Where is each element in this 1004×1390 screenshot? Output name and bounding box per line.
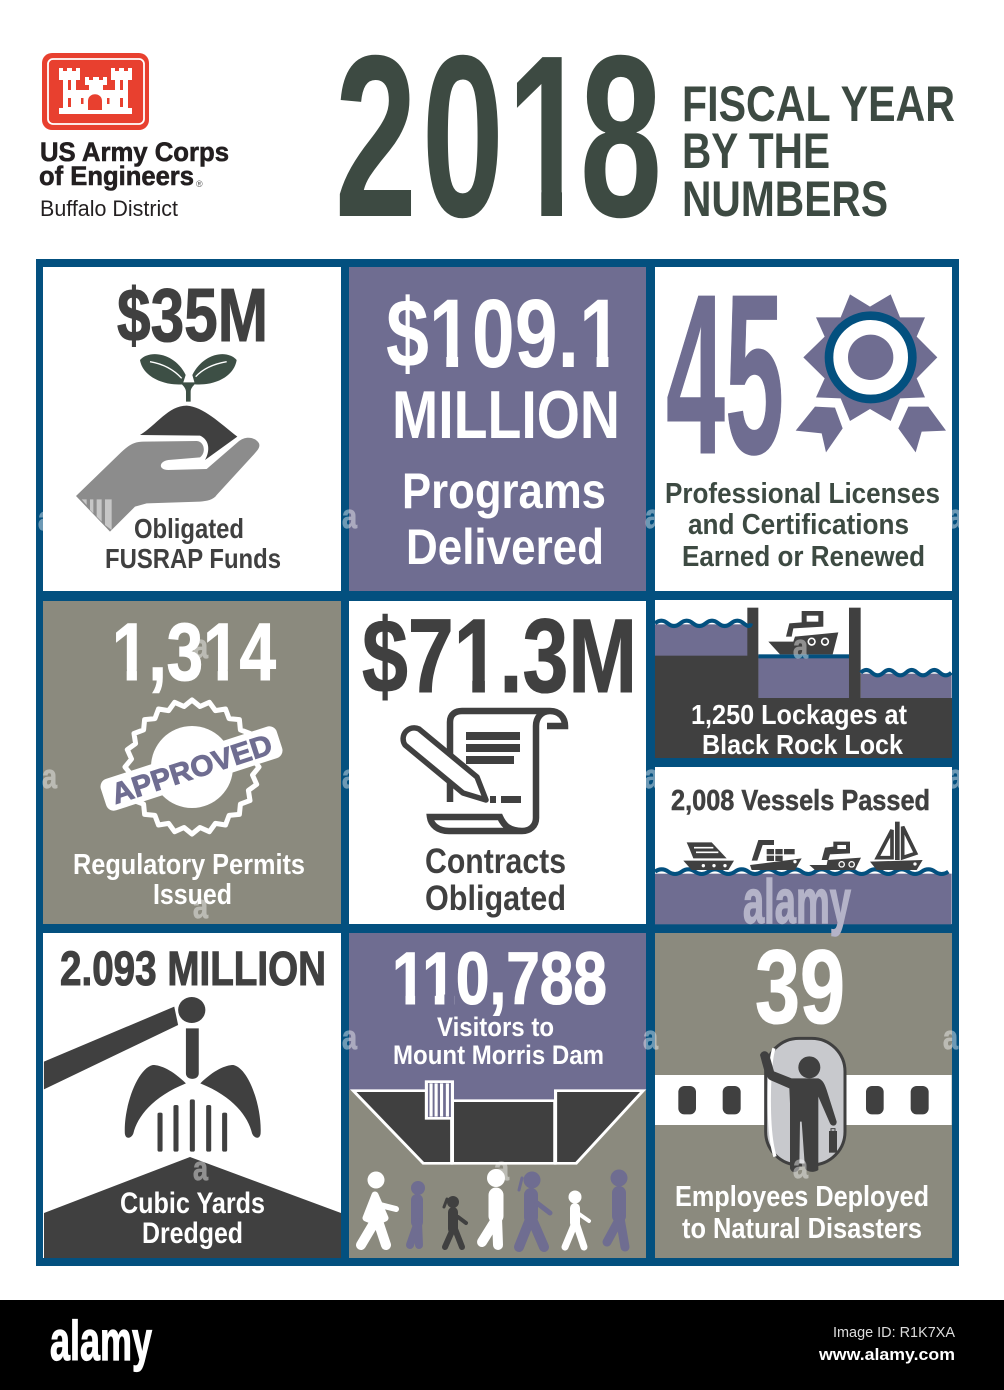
heading: Mount Morris Dam	[393, 1040, 604, 1070]
watermark letters: a	[494, 1150, 510, 1188]
illustration: lock chambers	[655, 608, 952, 698]
illustration: airplane with person in door	[655, 1038, 952, 1172]
icon: scroll and pencil	[403, 711, 565, 831]
panel: 110,788 visitors to Mount Morris Dam	[349, 933, 646, 1258]
panel: $35M FUSRAP funds	[43, 267, 341, 591]
caption	[120, 1187, 265, 1250]
heading: $71.3M: $71.3M	[362, 598, 637, 715]
panel: 1,250 lockages at Black Rock Lock	[655, 600, 952, 760]
caption: Obligated	[134, 513, 244, 544]
logo wordmark: US Army Corps	[40, 137, 229, 167]
caption: Cubic Yards	[120, 1187, 265, 1220]
logo wordmark: ®	[196, 179, 203, 189]
caption: Employees Deployed	[675, 1181, 929, 1213]
watermark letters: a	[793, 628, 809, 666]
panel: 1,314 regulatory permits	[43, 601, 341, 924]
caption: Contracts	[425, 842, 566, 881]
watermark letters: a	[342, 498, 358, 536]
panel: 39 employees deployed	[655, 929, 952, 1258]
panel: 45 licenses and certifications	[655, 248, 952, 591]
caption	[691, 699, 907, 760]
subtitle: fiscal year by the numbers: BY THE	[682, 123, 830, 179]
caption	[73, 849, 305, 911]
image id: Image ID: R1K7XA	[833, 1324, 955, 1341]
icon: red castle badge	[42, 53, 149, 130]
heading: 39: 39	[755, 929, 845, 1046]
icon: approved seal: APPROVED	[108, 729, 276, 811]
caption: FUSRAP Funds	[105, 543, 281, 574]
heading: Visitors to	[437, 1012, 554, 1042]
panel: $109.1 million programs delivered	[349, 267, 646, 591]
watermark letters: a	[342, 758, 358, 796]
logo wordmark	[39, 137, 229, 221]
watermark letters: a	[943, 1019, 959, 1057]
caption	[105, 513, 281, 574]
icon: sailboat	[870, 822, 923, 870]
caption	[665, 478, 940, 573]
caption: 1,250 Lockages at	[691, 699, 907, 730]
watermark letters: a	[193, 628, 209, 666]
caption: Regulatory Permits	[73, 849, 305, 881]
icon: award rosette	[796, 294, 946, 452]
icon: tugboat	[809, 842, 861, 870]
heading: 2,008 Vessels Passed	[671, 785, 930, 817]
icon: approved seal	[98, 700, 285, 834]
watermark letters: a	[193, 1150, 209, 1188]
watermark letters	[38, 498, 964, 1188]
caption: Professional Licenses	[665, 478, 940, 510]
subtitle: fiscal year by the numbers: NUMBERS	[682, 171, 888, 227]
watermark letters: a	[645, 498, 661, 536]
panel: $71.3M contracts obligated	[349, 598, 646, 924]
footer bar	[0, 1300, 1004, 1390]
illustration: dam	[353, 1082, 643, 1163]
watermark letters: a	[38, 500, 54, 538]
heading: 110,788	[392, 937, 607, 1020]
watermark letters: a	[793, 1148, 809, 1186]
icon: hand holding seedling	[76, 354, 259, 532]
logo: US Army Corps of Engineers Buffalo District	[39, 53, 229, 221]
footer logo: alamy: alamy	[50, 1309, 152, 1372]
watermark letters: a	[948, 498, 964, 536]
panel: $109.1 million programs delivered: Delivered	[406, 519, 604, 575]
watermark letters: a	[342, 1019, 358, 1057]
icon: tugboat in lock	[768, 611, 838, 654]
panel: 45 licenses and certifications: 45	[666, 248, 784, 502]
caption	[675, 1181, 929, 1245]
icon: dredge clamshell bucket	[44, 997, 261, 1152]
heading	[392, 937, 607, 1070]
caption: Black Rock Lock	[702, 729, 903, 760]
watermark: alamy: alamy	[743, 868, 851, 937]
panel: $109.1 million programs delivered: MILLION	[392, 377, 620, 453]
title: 2018: 2018	[335, 8, 662, 266]
icon: yacht	[683, 842, 734, 870]
dredged material mound	[44, 1157, 341, 1258]
watermark letters: a	[644, 758, 660, 796]
icon: cargo ship	[750, 840, 802, 870]
heading: 2.093 MILLION	[60, 943, 326, 996]
panel: 2,008 vessels passed	[655, 767, 952, 924]
watermark letters: a	[643, 1019, 659, 1057]
icon: person with briefcase	[760, 1051, 837, 1172]
caption: and Certifications	[688, 509, 909, 541]
caption	[425, 842, 566, 918]
caption: Issued	[153, 879, 232, 911]
panel: 2.093 million cubic yards dredged	[43, 933, 341, 1258]
caption: to Natural Disasters	[682, 1213, 922, 1245]
subtitle: fiscal year by the numbers: FISCAL YEAR	[682, 76, 955, 132]
caption: Earned or Renewed	[682, 541, 925, 573]
watermark letters: a	[948, 758, 964, 796]
heading: 1,314: 1,314	[112, 607, 276, 698]
heading: $35M: $35M	[117, 273, 268, 357]
watermark letters: a	[42, 758, 58, 796]
website: www.alamy.com	[818, 1345, 955, 1364]
subtitle: fiscal year by the numbers	[682, 76, 955, 227]
watermark letters: a	[193, 888, 209, 926]
icon: walking visitors	[361, 1169, 628, 1247]
logo wordmark: of Engineers	[39, 161, 194, 191]
panel: $109.1 million programs delivered: Programs	[402, 463, 606, 519]
grid frame	[36, 259, 959, 1266]
panel: $109.1 million programs delivered: $109.1	[386, 279, 622, 388]
caption: Obligated	[425, 879, 566, 918]
caption: Dredged	[142, 1217, 243, 1250]
logo wordmark: Buffalo District	[40, 196, 178, 221]
illustration: boats on water	[655, 822, 952, 924]
